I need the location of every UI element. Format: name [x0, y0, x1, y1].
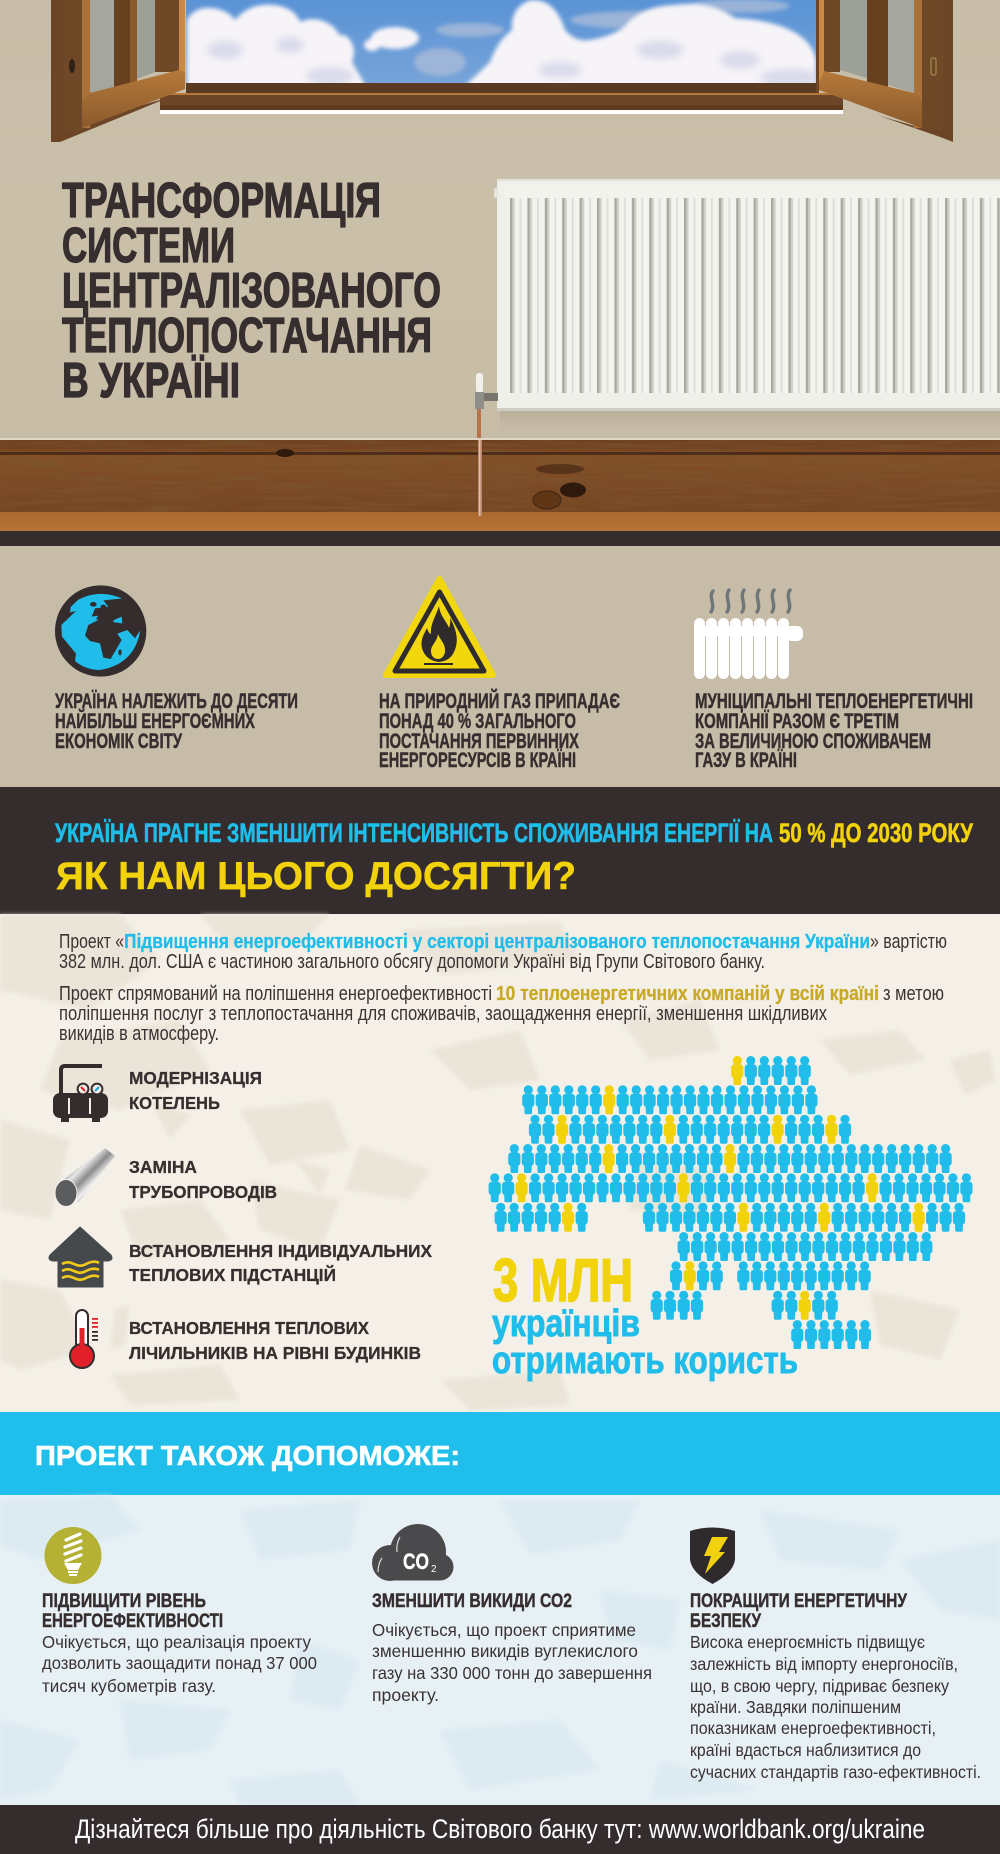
benefit 1 text: [42, 1632, 317, 1696]
intro paragraph 2: поліпшення послуг з теплопостачання для споживачів, заощадження енергії, зменшення шкідливих: [59, 1003, 827, 1025]
fact 3 text: ГАЗУ В КРАЇНІ: [695, 749, 797, 772]
text: substations: ТЕПЛОВИХ ПІДСТАНЦІЙ: [129, 1264, 336, 1285]
text: boilers: КОТЕЛЕНЬ: [129, 1093, 220, 1113]
fact 2 text: ПОСТАЧАННЯ ПЕРВИННИХ: [379, 730, 579, 753]
intro paragraph 2: з метою: [883, 983, 944, 1005]
footer: [0, 1805, 1000, 1854]
title: В УКРАЇНІ: [62, 354, 240, 408]
window: [51, 0, 953, 142]
text: boilers: [129, 1068, 262, 1113]
benefit 3 heading: БЕЗПЕКУ: [690, 1610, 762, 1632]
icon: pipe: [55, 1148, 115, 1206]
panel: project description: [0, 914, 1000, 1412]
benefit 3 text: показникам енергоефективності,: [690, 1718, 936, 1738]
panel: key facts: [0, 546, 1000, 787]
benefit 3 heading: ПОКРАЩИТИ ЕНЕРГЕТИЧНУ: [690, 1590, 908, 1612]
fact 2 text: ЕНЕРГОРЕСУРСІВ В КРАЇНІ: [379, 749, 576, 772]
icon: radiator with steam: [694, 590, 803, 679]
panel: also helps heading: ПРОЕКТ ТАКОЖ ДОПОМОЖЕ:: [35, 1440, 460, 1471]
icon: flammable warning triangle: [386, 579, 493, 675]
icon: house with heat: [49, 1227, 112, 1287]
fact 2 text: НА ПРИРОДНИЙ ГАЗ ПРИПАДАЄ: [379, 689, 620, 713]
icon: CO2 cloud: 2: [431, 1564, 437, 1575]
title: ЦЕНТРАЛІЗОВАНОГО: [62, 264, 441, 318]
icon: shield with lightning: [690, 1528, 735, 1584]
icon: thermometer: [70, 1310, 98, 1368]
fact 2 text: ПОНАД 40 % ЗАГАЛЬНОГО: [379, 710, 576, 733]
benefit 3 text: [690, 1632, 981, 1782]
benefit 1 heading: ЕНЕРГОЕФЕКТИВНОСТІ: [42, 1610, 223, 1632]
fact 3 text: [695, 690, 973, 772]
benefit 3 text: країни. Завдяки поліпшеним: [690, 1697, 901, 1717]
intro paragraph 2: Проект спрямований на поліпшення енергоефективності: [59, 983, 492, 1005]
text: pipelines: ТРУБОПРОВОДІВ: [129, 1182, 277, 1202]
text: substations: [129, 1241, 432, 1285]
right shutter: [816, 0, 953, 142]
benefit 1 text: дозволить заощадити понад 37 000: [42, 1653, 317, 1673]
goal statement: УКРАЇНА ПРАГНЕ ЗМЕНШИТИ ІНТЕНСИВНІСТЬ СПОЖИВАННЯ ЕНЕРГІЇ НА: [55, 818, 773, 848]
panel: also helps heading: [0, 1412, 1000, 1495]
text: heat meters: ВСТАНОВЛЕННЯ ТЕПЛОВИХ: [129, 1318, 369, 1338]
dark divider bar: [0, 531, 1000, 546]
icon: globe: [55, 585, 146, 677]
benefit 2 text: зменшенню викидів вуглекислого: [372, 1641, 638, 1661]
benefit 3 text: країні вдасться наблизитися до: [690, 1740, 921, 1760]
title: ТРАНСФОРМАЦІЯ: [62, 174, 381, 228]
callout: 3 million: 3 МЛН: [493, 1247, 633, 1314]
benefit 2 text: проекту.: [372, 1685, 439, 1705]
text: pipelines: [129, 1157, 277, 1202]
icon: energy-saving bulb: [44, 1527, 102, 1584]
benefit 2 text: Очікується, що проект сприятиме: [372, 1620, 636, 1640]
benefit 3 heading: [690, 1590, 908, 1632]
text: pipelines: ЗАМІНА: [129, 1157, 197, 1177]
intro paragraph 1: Проект «: [59, 931, 124, 953]
title: СИСТЕМИ: [62, 219, 235, 273]
intro paragraph 1: Підвищення енергоефективності у секторі централізованого теплопостачання України: [124, 931, 870, 953]
benefit 3 text: залежність від імпорту енергоносіїв,: [690, 1654, 958, 1674]
valve and pipe: [475, 373, 498, 440]
fact 1 text: ЕКОНОМІК СВІТУ: [55, 730, 183, 753]
benefit 1 heading: [42, 1590, 223, 1632]
text: heat meters: [129, 1318, 421, 1363]
text: heat meters: ЛІЧИЛЬНИКІВ НА РІВНІ БУДИНКІВ: [129, 1343, 421, 1363]
fact 3 text: КОМПАНІЇ РАЗОМ Є ТРЕТІМ: [695, 710, 899, 733]
benefit 1 text: Очікується, що реалізація проекту: [42, 1632, 311, 1652]
question heading: ЯК НАМ ЦЬОГО ДОСЯГТИ?: [56, 855, 576, 898]
intro paragraph 1: [59, 931, 947, 973]
sky with clouds: [186, 0, 820, 90]
icon: CO2 cloud: [372, 1524, 454, 1581]
skirting board and floor: [0, 438, 1000, 531]
bottom window frame: [160, 83, 843, 114]
callout: 3 million: отримають користь: [492, 1340, 798, 1382]
wall background: [0, 0, 1000, 440]
intro paragraph 1: » вартістю: [870, 931, 947, 953]
panel: goal banner: [0, 787, 1000, 914]
title: [62, 174, 441, 408]
benefit 3 text: що, в свою чергу, підриває безпеку: [690, 1676, 949, 1696]
title: ТЕПЛОПОСТАЧАННЯ: [62, 309, 432, 363]
fact 1 text: НАЙБІЛЬШ ЕНЕРГОЄМНИХ: [55, 709, 255, 733]
fact 1 text: УКРАЇНА НАЛЕЖИТЬ ДО ДЕСЯТИ: [55, 690, 298, 713]
icon: CO2 cloud: CO: [403, 1549, 429, 1574]
callout: 3 million: [492, 1247, 798, 1382]
intro paragraph 2: викидів в атмосферу.: [59, 1023, 219, 1045]
icon: boiler: [53, 1066, 108, 1122]
callout: 3 million: українців: [492, 1303, 640, 1345]
intro paragraph 1: 382 млн. дол. США є частиною загального обсягу допомоги Україні від Групи Світового банку.: [59, 951, 765, 973]
benefit 2 text: газу на 330 000 тонн до завершення: [372, 1663, 652, 1683]
left shutter: [51, 0, 185, 142]
fact 2 text: [379, 689, 620, 772]
benefit 1 heading: ПІДВИЩИТИ РІВЕНЬ: [42, 1590, 206, 1612]
benefit 2 text: [372, 1620, 652, 1705]
map of Ukraine made of people: [489, 1056, 973, 1349]
text: boilers: МОДЕРНІЗАЦІЯ: [129, 1068, 262, 1088]
panel: benefits: [0, 1495, 1000, 1805]
benefit 3 text: Висока енергоємність підвищує: [690, 1632, 925, 1652]
intro paragraph 2: 10 теплоенергетичних компаній у всій країні: [496, 983, 879, 1005]
benefit 1 text: тисяч кубометрів газу.: [42, 1676, 216, 1696]
radiator: [475, 179, 1000, 440]
fact 1 text: [55, 690, 298, 753]
text: substations: ВСТАНОВЛЕННЯ ІНДИВІДУАЛЬНИХ: [129, 1241, 432, 1261]
intro paragraph 2: [59, 983, 944, 1045]
benefit 2 heading: ЗМЕНШИТИ ВИКИДИ СО2: [372, 1590, 572, 1612]
